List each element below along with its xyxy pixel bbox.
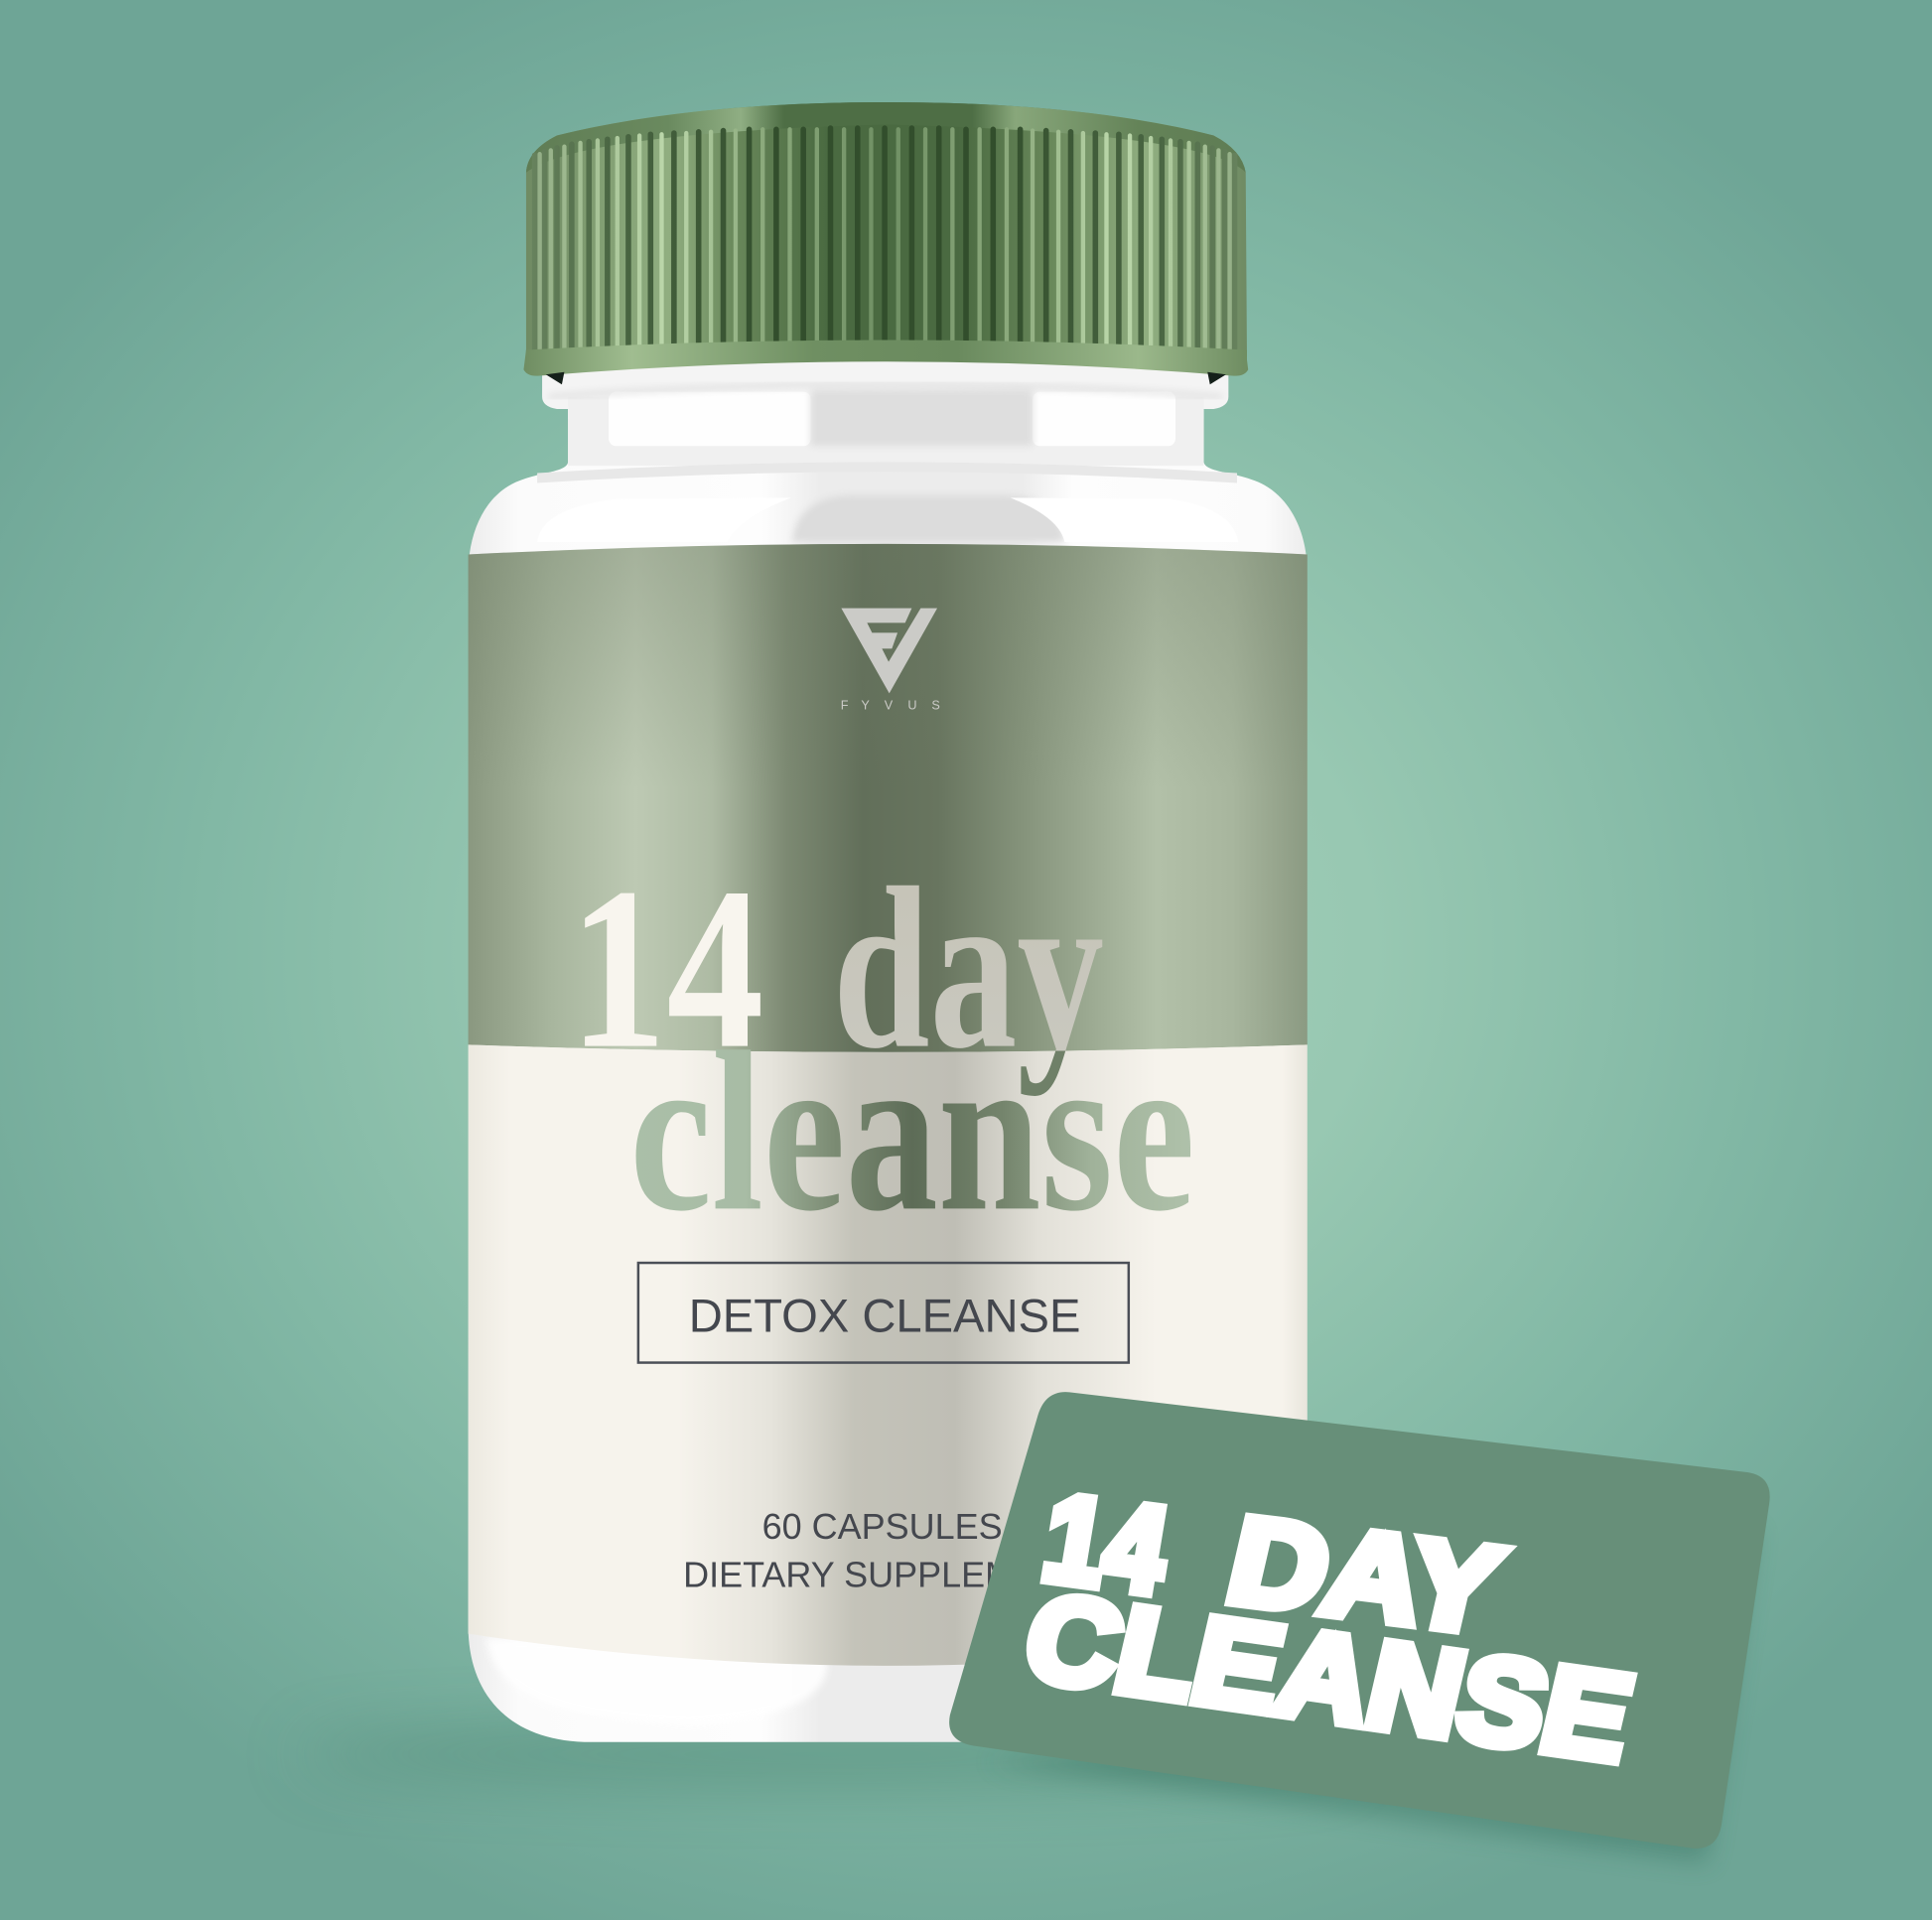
bottle neck ring <box>542 359 1228 419</box>
product title: 14: 14 <box>569 841 763 1097</box>
cap dark ribs <box>535 128 1235 353</box>
neck highlights <box>537 389 1238 542</box>
label: green band top shade <box>469 544 1308 788</box>
green ribbed cap <box>523 102 1248 384</box>
sticker heading: 14 day <box>1035 1469 1514 1659</box>
bottom base highlight <box>486 1639 827 1724</box>
cap lower band <box>526 341 1247 364</box>
label: cream band <box>469 1044 1308 1666</box>
cap top band <box>526 102 1246 173</box>
bottle <box>469 359 1308 1742</box>
brand logo <box>841 609 940 712</box>
capsule count and supplement text <box>683 1506 1086 1594</box>
sticker shadow <box>986 1528 1756 1862</box>
neck ring shading line <box>548 384 1222 397</box>
detox cleanse box: DETOX CLEANSE <box>689 1290 1080 1342</box>
sticker heading: 14 day: DAY <box>1216 1492 1514 1659</box>
sticker heading: cleanse: CLEANSE <box>1013 1569 1644 1787</box>
floor shadow under bottle <box>296 1729 1355 1779</box>
cap light ribs <box>540 129 1230 353</box>
cap flange <box>523 341 1248 376</box>
cap gap shadows <box>546 372 1226 384</box>
capsule count and supplement text: DIETARY SUPPLEMENT <box>683 1554 1086 1594</box>
detox cleanse box <box>638 1263 1129 1363</box>
product title: day: day <box>833 841 1104 1097</box>
sticker card <box>949 1392 1770 1849</box>
capsule count and supplement text: 60 CAPSULES <box>762 1506 1003 1547</box>
cap shell <box>526 102 1247 357</box>
sticker badge <box>949 1392 1770 1849</box>
label: green band <box>469 544 1308 1052</box>
product title: cleanse: cleanse <box>629 1004 1195 1258</box>
logo wordmark: FYVUS <box>841 698 940 712</box>
sticker heading: 14 day: 14 <box>1035 1469 1176 1620</box>
bottle body <box>469 407 1308 1742</box>
logo mark <box>841 609 937 693</box>
